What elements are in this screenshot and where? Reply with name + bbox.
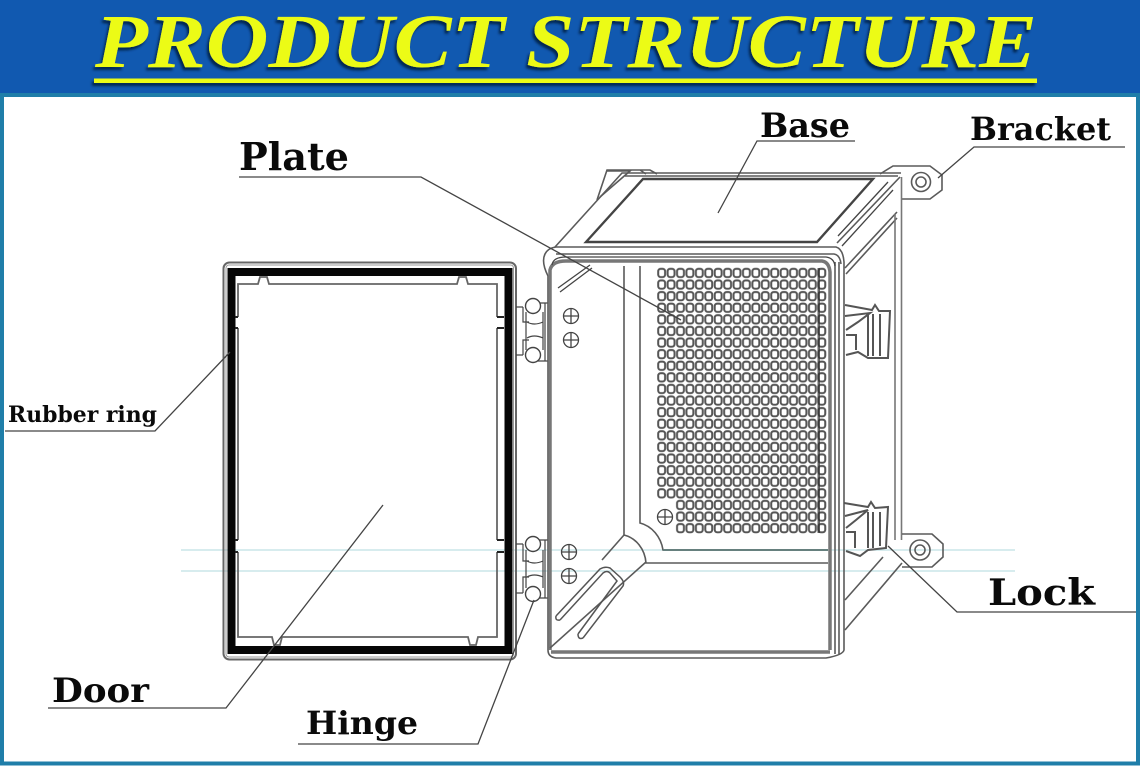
mounting plate perforations	[657, 267, 827, 534]
label: Lock	[888, 546, 1136, 614]
door outer frame	[224, 262, 516, 660]
rear bracket	[597, 170, 657, 200]
top face	[555, 173, 901, 247]
label: Hinge: Hinge	[306, 704, 418, 742]
right side face	[845, 212, 897, 274]
lower lock clasp	[844, 502, 888, 556]
label: Rubber ring	[5, 352, 230, 431]
label: Bracket	[938, 110, 1125, 178]
bottom hinge	[516, 536, 549, 602]
enclosure base	[544, 166, 943, 658]
top mounting lug	[880, 166, 942, 199]
header band	[0, 0, 1140, 93]
door inner outline	[238, 277, 497, 645]
front frame	[544, 247, 844, 658]
upper lock clasp	[845, 305, 890, 358]
faint horizontal guide lines	[181, 550, 1015, 571]
label: Door	[48, 505, 383, 711]
rubber ring seal	[232, 272, 508, 650]
title: PRODUCT STRUCTURE	[94, 0, 1037, 84]
hinges	[516, 298, 549, 602]
door	[224, 262, 516, 660]
label: Hinge	[298, 600, 534, 744]
label: Base: Base	[760, 106, 850, 146]
lower mounting lug	[902, 534, 943, 567]
top hinge	[516, 298, 549, 362]
top left rod	[558, 265, 592, 292]
drain slots	[556, 567, 624, 638]
screws	[562, 308, 672, 584]
label: Door: Door	[52, 671, 150, 711]
label: Plate: Plate	[239, 134, 349, 179]
interior back panel recess	[624, 266, 828, 563]
label: Lock: Lock	[988, 572, 1096, 614]
label: Rubber ring: Rubber ring	[8, 402, 157, 428]
label: Base	[718, 106, 855, 213]
label: Plate	[239, 134, 681, 320]
label: Bracket: Bracket	[970, 110, 1111, 148]
